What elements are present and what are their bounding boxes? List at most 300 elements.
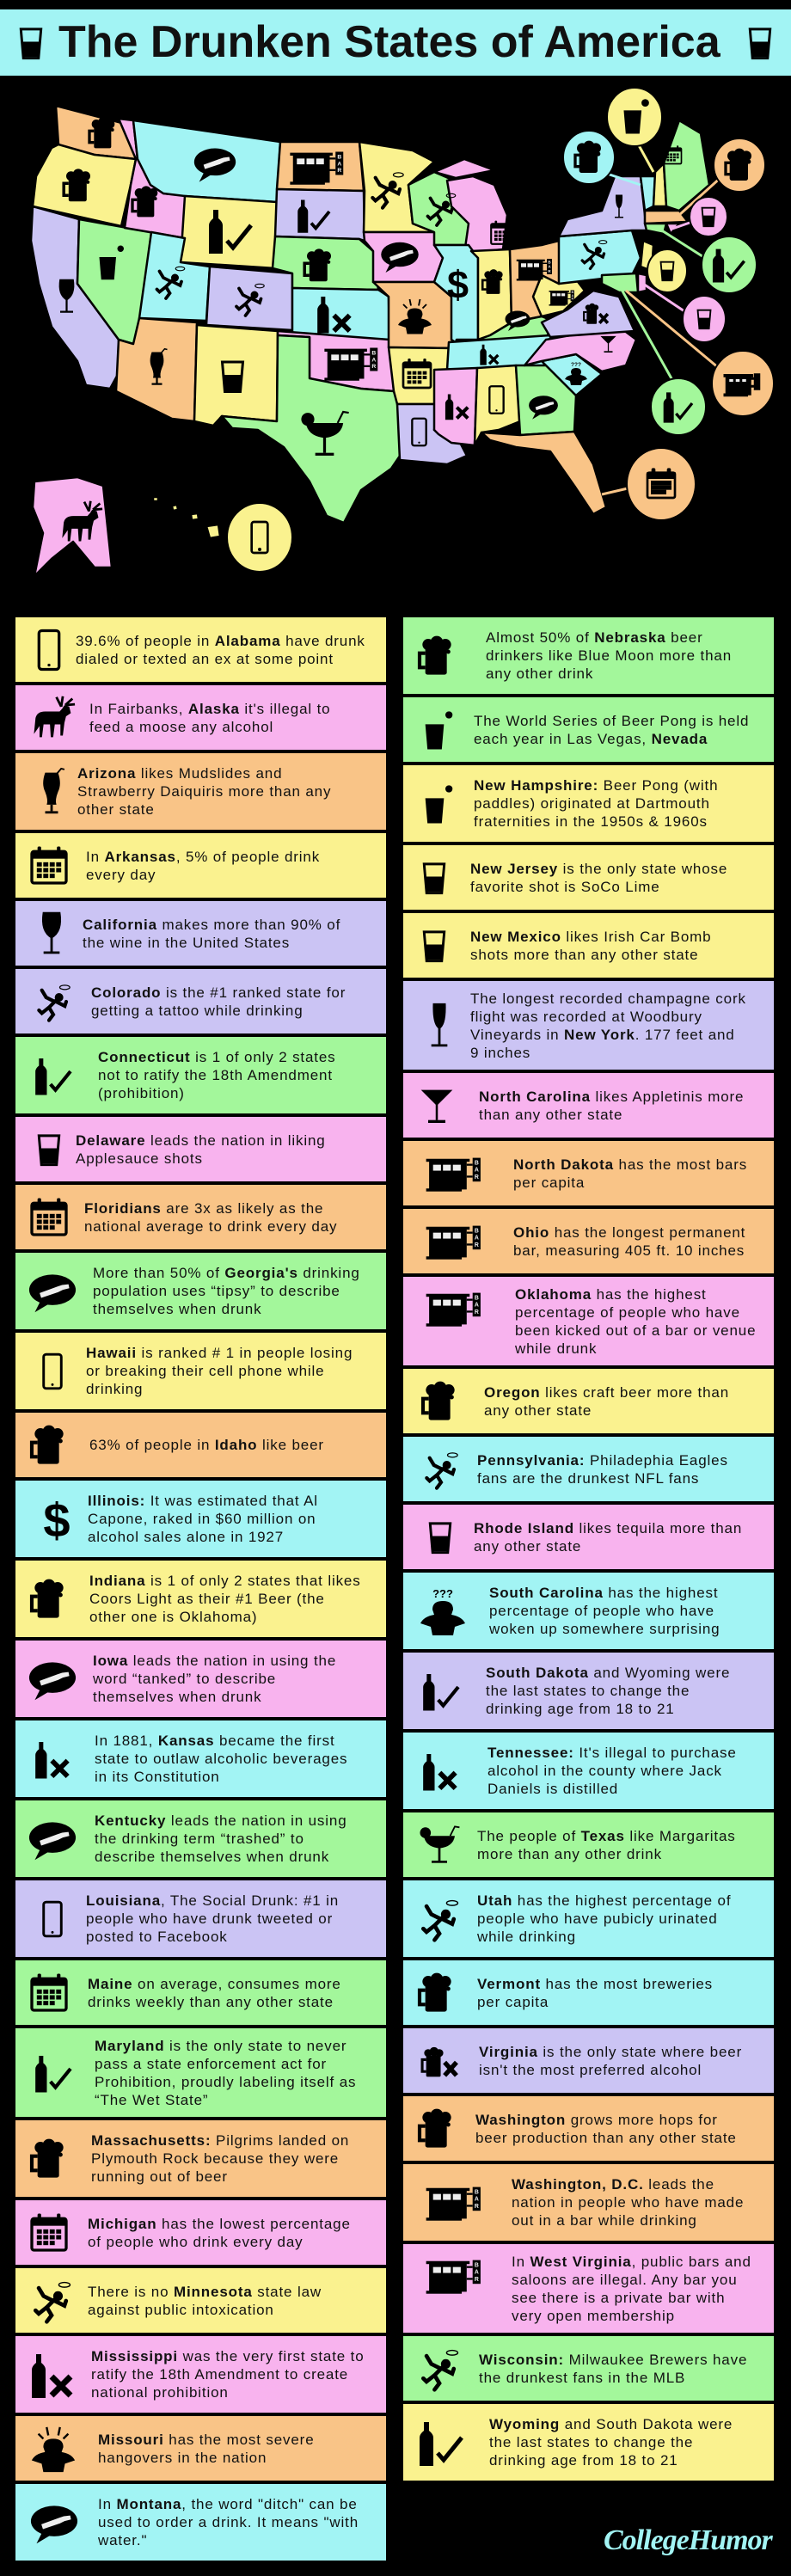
card: South Carolina: [403, 1573, 774, 1649]
text: [403, 927, 711, 963]
icon: bar: [415, 1289, 494, 1328]
icon: Arizona hurricane: [150, 349, 167, 385]
right column of state facts: [403, 617, 774, 2481]
callout: Vermont beer: [563, 131, 615, 184]
map of the United States: [32, 89, 773, 573]
icon: Colorado falling: [236, 284, 264, 316]
icon: calendar: [28, 2211, 71, 2254]
text: feed a moose any alcohol: [89, 719, 273, 734]
card: Oklahoma: [403, 1277, 774, 1365]
icon: New Mexico shot: [222, 362, 242, 392]
text: South Dakota and Wyoming were: [486, 1665, 730, 1681]
text: Oregon likes craft beer more than: [484, 1384, 729, 1400]
callout: Massachusetts beer: [714, 138, 765, 192]
text: other state: [77, 801, 155, 818]
text: population uses “tipsy” to describe: [93, 1283, 340, 1299]
text: Massachusetts: Pilgrims landed on: [91, 2132, 349, 2149]
icon: New York flute: [615, 194, 623, 218]
text: [76, 633, 365, 667]
text: Pennsylvania: Philadephia Eagles: [477, 1451, 728, 1469]
card: Massachusetts: [15, 2120, 386, 2197]
text: people who have pubicly urinated: [477, 1911, 718, 1927]
icon: bottle check: [35, 1058, 72, 1095]
text: In Fairbanks, Alaska it's illegal to: [89, 700, 330, 717]
text: favorite shot is SoCo Lime: [470, 879, 660, 894]
text: isn't the most preferred alcohol: [479, 2062, 702, 2077]
callout: Rhode Island shot: [690, 197, 727, 236]
icon: Georgia bubble: [529, 396, 558, 420]
callout circles: [227, 88, 774, 572]
text: [95, 1733, 347, 1785]
icon: phone: [42, 1900, 63, 1938]
text: Delaware leads the nation in liking: [76, 1132, 326, 1149]
text: the last states to change the: [486, 1683, 690, 1699]
text: Ohio has the longest permanent: [513, 1224, 745, 1240]
text: per capita: [477, 1993, 549, 2010]
text: the wine in the United States: [83, 934, 290, 951]
icon: calendar: [28, 1971, 71, 2014]
CollegeHumor logo: CollegeHumor: [604, 2524, 772, 2556]
text: [15, 2036, 356, 2108]
text: posted to Facebook: [86, 1929, 228, 1945]
text: nation in people who have made: [512, 2194, 744, 2211]
text: woken up somewhere surprising: [489, 1621, 720, 1637]
text: Arizona likes Mudslides and: [77, 765, 282, 782]
text: South Carolina has the highest: [489, 1585, 718, 1601]
text: [15, 2282, 322, 2318]
card: California: [15, 901, 386, 966]
icon: shot: [38, 1134, 60, 1166]
text: drinking: [86, 1381, 143, 1397]
text: [76, 1132, 326, 1166]
card: Washington: [403, 2096, 774, 2161]
icon: Texas margarita: [301, 412, 349, 456]
callout: New Jersey shot: [647, 249, 687, 292]
icon: Kansas bottle x: [317, 297, 350, 334]
text: California makes more than 90% of: [83, 917, 340, 932]
icon: Mississippi bottle x: [445, 394, 468, 420]
text: Missouri has the most severe: [98, 2432, 315, 2447]
text: national average to drink every day: [84, 1217, 337, 1235]
icon: Utah falling: [156, 267, 185, 298]
text: alcohol sales alone in 1927: [88, 1529, 284, 1545]
text: other one is Oklahoma): [89, 1609, 257, 1625]
text: getting a tattoo while drinking: [91, 1003, 304, 1018]
text: Floridians are 3x as likely as the: [84, 1200, 323, 1216]
icon: Missouri hangover: [398, 299, 432, 334]
icon: Oregon beer: [64, 169, 90, 201]
text: [86, 848, 320, 882]
text: The longest recorded champagne cork: [470, 991, 746, 1006]
text: state to outlaw alcoholic beverages: [95, 1751, 347, 1767]
card: Missouri: [15, 2416, 386, 2481]
icon: shot: [419, 1518, 462, 1556]
card: Arkansas: [15, 833, 386, 898]
text: [403, 989, 746, 1061]
card: Michigan: [15, 2200, 386, 2265]
text: word “tanked” to describe: [93, 1671, 276, 1687]
icon: beer mug: [415, 2107, 458, 2150]
card: Iowa: [15, 1641, 386, 1717]
icon: dollar: [44, 1501, 70, 1541]
text: Daniels is distilled: [487, 1781, 618, 1797]
text: Connecticut is 1 of only 2 states: [98, 1049, 336, 1065]
card: Texas: [403, 1812, 774, 1877]
icon: Kentucky bubble: [506, 311, 530, 331]
text: [403, 712, 749, 748]
icon: Wisconsin falling: [428, 193, 456, 225]
card: New Hampshire: [403, 765, 774, 842]
icon: surprised man: [415, 1585, 470, 1637]
card: Wisconsin: [403, 2336, 774, 2401]
card: Hawaii: [15, 1333, 386, 1409]
card: Alabama: [15, 617, 386, 682]
text: against public intoxication: [88, 2301, 274, 2318]
text: every day: [86, 867, 156, 882]
text: very open membership: [512, 2308, 675, 2323]
icon: Michigan calendar: [491, 221, 513, 244]
icon: falling man: [415, 1448, 467, 1491]
card: Arizona: [15, 753, 386, 830]
icon: bar: [415, 2182, 494, 2222]
text: Louisiana, The Social Drunk: #1 in: [86, 1892, 339, 1909]
icon: shot glass left: [19, 28, 43, 60]
icon: bar: [415, 2256, 494, 2296]
icon: falling man: [28, 2275, 76, 2327]
text: [91, 984, 346, 1018]
text: [15, 1974, 341, 2010]
icon: beer mug: [28, 2137, 71, 2180]
icon: bottle check: [415, 1670, 467, 1713]
text: 9 inches: [470, 1044, 530, 1061]
text: [403, 2253, 751, 2325]
card: Idaho: [15, 1413, 386, 1477]
icon: beer pong: [415, 703, 458, 755]
card: West Virginia: [403, 2244, 774, 2333]
text: Coors Light as their #1 Beer (the: [89, 1591, 325, 1607]
icon: beer mug: [415, 633, 458, 679]
text: [403, 1223, 745, 1259]
text: dialed or texted an ex at some point: [76, 650, 334, 667]
card: Georgia: [15, 1253, 386, 1329]
icon: South Dakota bottle check: [297, 199, 329, 233]
text: the last states to change the: [489, 2434, 693, 2450]
text: fans are the drunkest NFL fans: [477, 1470, 699, 1486]
icon: hangover: [28, 2423, 79, 2473]
card: Vermont: [403, 1960, 774, 2025]
text: Iowa leads the nation in using the: [93, 1653, 336, 1669]
card: Illinois: [15, 1481, 386, 1557]
left column of state facts: [15, 617, 386, 2561]
text: Indiana is 1 of only 2 states that likes: [89, 1573, 361, 1589]
text: of people who drink every day: [88, 2234, 304, 2249]
text: [15, 2131, 349, 2186]
icon: Oklahoma bar: [324, 347, 377, 381]
icon: Arkansas calendar: [403, 359, 431, 388]
icon: bar: [415, 1221, 494, 1260]
text: [89, 700, 330, 734]
text: [403, 1664, 730, 1718]
text: There is no Minnesota state law: [88, 2284, 322, 2299]
text: in its Constitution: [95, 1769, 220, 1785]
card: Tennessee: [403, 1733, 774, 1809]
callout: Delaware shot: [683, 296, 726, 342]
text: [95, 1812, 347, 1865]
callout: Florida calendar: [627, 448, 696, 520]
text: [403, 1156, 747, 1192]
state shapes: [31, 106, 709, 576]
text: Kentucky leads the nation in using: [95, 1812, 347, 1829]
text: Virginia is the only state where beer: [479, 2043, 742, 2060]
callout: Maryland bottle check: [651, 378, 706, 435]
text: Tennessee: It's illegal to purchase: [487, 1745, 737, 1761]
text: percentage of people who have: [489, 1603, 714, 1619]
icon: bottle x: [28, 2349, 79, 2401]
text: Mississippi was the very first state to: [91, 2348, 365, 2364]
icon: Virginia beer x: [584, 304, 608, 324]
icon: speech bubble: [26, 2499, 83, 2547]
text: [93, 1653, 336, 1705]
icon: Alabama phone: [489, 386, 504, 414]
card: Indiana: [15, 1561, 386, 1637]
icon: Nevada pong: [100, 246, 124, 279]
text: Prohibition, proudly labeling itself as: [95, 2074, 356, 2089]
text: shots more than any other state: [470, 946, 698, 963]
card: Alaska: [15, 685, 386, 750]
icon: beer mug: [29, 1579, 64, 1618]
text: used to order a drink. It means "with: [98, 2514, 359, 2530]
text: North Dakota has the most bars: [513, 1156, 747, 1173]
text: [77, 765, 331, 818]
card: North Carolina: [403, 1073, 774, 1138]
text: “The Wet State”: [95, 2091, 208, 2108]
card: Florida: [15, 1185, 386, 1249]
icon: beer mug: [419, 1379, 462, 1422]
text: [89, 1573, 361, 1625]
text: or breaking their cell phone while: [86, 1363, 324, 1379]
text: the drinking term “trashed” to: [95, 1831, 304, 1847]
card: Rhode Island: [403, 1505, 774, 1569]
card: Utah: [403, 1880, 774, 1957]
text: while drinking: [477, 1929, 576, 1945]
text: New Mexico likes Irish Car Bomb: [470, 929, 711, 944]
card: Montana: [15, 2484, 386, 2561]
text: [403, 629, 732, 683]
text: Capone, raked in $60 million on: [88, 1511, 316, 1527]
text: [15, 2215, 351, 2251]
text: more than any other drink: [477, 1845, 662, 1862]
text: In Montana, the word "ditch" can be: [98, 2496, 358, 2512]
text: [403, 2175, 744, 2229]
callout: Hawaii phone: [227, 503, 292, 572]
text: beer production than any other state: [475, 2129, 737, 2146]
icon: Washington beer: [89, 117, 114, 148]
header banner: [0, 9, 791, 76]
icon: Louisiana phone: [412, 419, 426, 445]
text: paddles) originated at Dartmouth: [474, 795, 710, 812]
text: any other state: [484, 1401, 592, 1419]
card: Nebraska: [403, 617, 774, 694]
card: Kansas: [15, 1720, 386, 1797]
text: Washington, D.C. leads the: [512, 2176, 714, 2193]
icon: Iowa bubble: [381, 242, 419, 273]
icon: Nebraska beer: [304, 248, 331, 281]
icon: phone: [42, 1353, 63, 1389]
text: [403, 1087, 744, 1123]
icon: bottle check: [28, 2052, 79, 2095]
text: [403, 1584, 720, 1638]
icon: North Carolina martini: [600, 336, 616, 353]
text: (prohibition): [98, 1085, 185, 1101]
text: Hawaii is ranked # 1 in people losing: [86, 1345, 353, 1361]
text: themselves when drunk: [93, 1689, 261, 1705]
text: 39.6% of people in Alabama have drunk: [76, 633, 365, 648]
icon: Ohio bar: [517, 259, 552, 280]
card: New Jersey: [403, 845, 774, 910]
icon: shot: [415, 922, 453, 970]
icon: California wine: [59, 279, 74, 313]
icon: hurricane glass: [43, 767, 65, 813]
text: In Arkansas, 5% of people drink: [86, 848, 320, 865]
card: Oregon: [403, 1369, 774, 1433]
text: drinkers like Blue Moon more than: [486, 647, 732, 664]
text: Strawberry Daiquiris more than any: [77, 783, 331, 800]
callout: Connecticut bottle check: [702, 236, 757, 293]
text: Rhode Island likes tequila more than: [474, 1520, 742, 1536]
text: [403, 1285, 756, 1357]
icon: margarita: [415, 1821, 463, 1868]
icon: falling man: [37, 984, 71, 1022]
text: Colorado is the #1 ranked state for: [91, 984, 346, 1001]
text: Vineyards in New York. 177 feet and: [470, 1027, 735, 1042]
icon: bottle x: [415, 1749, 467, 1792]
text: themselves when drunk: [93, 1301, 261, 1317]
text: [15, 2495, 359, 2549]
icon: bottle x: [35, 1742, 70, 1778]
text: the drunkest fans in the MLB: [479, 2370, 685, 2385]
text: percentage of people who have: [515, 1303, 740, 1321]
map icons: [59, 117, 682, 542]
text: Wisconsin: Milwaukee Brewers have: [479, 2351, 747, 2368]
text: [403, 2415, 733, 2469]
text: [86, 1892, 339, 1945]
card: South Dakota: [403, 1653, 774, 1729]
text: The people of Texas like Margaritas: [477, 1828, 736, 1843]
card: Virginia: [403, 2028, 774, 2093]
text: national prohibition: [91, 2384, 229, 2401]
text: than any other state: [479, 1106, 622, 1123]
card: Louisiana: [15, 1880, 386, 1957]
icon: Illinois dollar: [447, 263, 469, 306]
card: Mississippi: [15, 2336, 386, 2413]
text: The World Series of Beer Pong is held: [474, 712, 749, 729]
icon: speech bubble: [29, 1822, 76, 1861]
icon: Minnesota falling: [372, 173, 403, 208]
text: [15, 2430, 315, 2466]
text: water.": [98, 2532, 147, 2548]
icon: shot: [415, 853, 453, 901]
card: Pennsylvania: [403, 1437, 774, 1501]
text: Almost 50% of Nebraska beer: [486, 629, 703, 646]
card: Washington DC: [403, 2164, 774, 2241]
text: Maryland is the only state to never: [95, 2038, 346, 2053]
text: [403, 1826, 736, 1862]
text: In West Virginia, public bars and: [512, 2253, 751, 2270]
text: bar, measuring 405 ft. 10 inches: [513, 1242, 745, 1259]
text: alcohol in the county where Jack: [487, 1763, 722, 1779]
text: Illinois: It was estimated that Al: [88, 1493, 318, 1509]
card: North Dakota: [403, 1141, 774, 1205]
text: describe themselves when drunk: [95, 1849, 329, 1865]
text: More than 50% of Georgia's drinking: [93, 1265, 360, 1281]
icon: Montana bubble: [194, 148, 236, 182]
card: New Mexico: [403, 913, 774, 978]
text: [403, 1451, 728, 1487]
icon: falling man: [415, 1893, 463, 1945]
icon: speech bubble: [29, 1662, 76, 1701]
callout: Washington DC bar: [712, 351, 774, 416]
text: drinks weekly than any other state: [88, 1993, 334, 2010]
icon: Indiana beer: [482, 269, 503, 294]
card: Ohio: [403, 1209, 774, 1273]
text: fraternities in the 1950s & 1960s: [474, 813, 708, 830]
text: 63% of people in Idaho like beer: [89, 1437, 324, 1453]
card: Maine: [15, 1960, 386, 2025]
text: not to ratify the 18th Amendment: [98, 1067, 333, 1083]
icon: shot glass right: [748, 28, 772, 60]
text: any other state: [474, 1537, 581, 1555]
icon: Alaska moose: [62, 501, 102, 542]
card: Delaware: [15, 1117, 386, 1181]
text: [403, 1892, 731, 1946]
text: Oklahoma has the highest: [515, 1286, 707, 1302]
text: [15, 2347, 365, 2401]
icon: Tennessee bottle x: [480, 345, 498, 365]
text: see there is a private bar with: [512, 2289, 725, 2306]
text: Utah has the highest percentage of: [477, 1892, 731, 1909]
text: [403, 1518, 742, 1555]
text: [98, 1049, 336, 1101]
text: pass a state enforcement act for: [95, 2055, 327, 2072]
text: Michigan has the lowest percentage: [88, 2215, 351, 2232]
text: Applesauce shots: [76, 1150, 203, 1166]
text: each year in Las Vegas, Nevada: [474, 731, 708, 746]
text: saloons are illegal. Any bar you: [512, 2272, 738, 2287]
icon: beer pong: [415, 777, 458, 829]
icon: beer x: [412, 2041, 467, 2081]
icon: moose: [34, 696, 76, 738]
text: [403, 1974, 713, 2010]
card: Wyoming: [403, 2404, 774, 2481]
card: Nevada: [403, 697, 774, 762]
card: Connecticut: [15, 1037, 386, 1113]
icon: champagne flute: [415, 997, 463, 1052]
text: [403, 2110, 737, 2146]
card: New York: [403, 981, 774, 1070]
icon: Maine calendar: [664, 145, 681, 163]
text: [84, 1200, 337, 1235]
text: [403, 1744, 737, 1798]
icon: martini: [415, 1082, 458, 1128]
text: while drunk: [515, 1340, 597, 1357]
icon: Idaho beer: [132, 186, 157, 217]
icon: Wyoming bottle check: [209, 210, 251, 254]
icon: bottle check: [415, 2416, 467, 2468]
icon: calendar: [30, 846, 68, 885]
text: Washington grows more hops for: [475, 2112, 718, 2127]
text: out in a bar while drinking: [512, 2212, 697, 2229]
text: per capita: [513, 1175, 585, 1190]
